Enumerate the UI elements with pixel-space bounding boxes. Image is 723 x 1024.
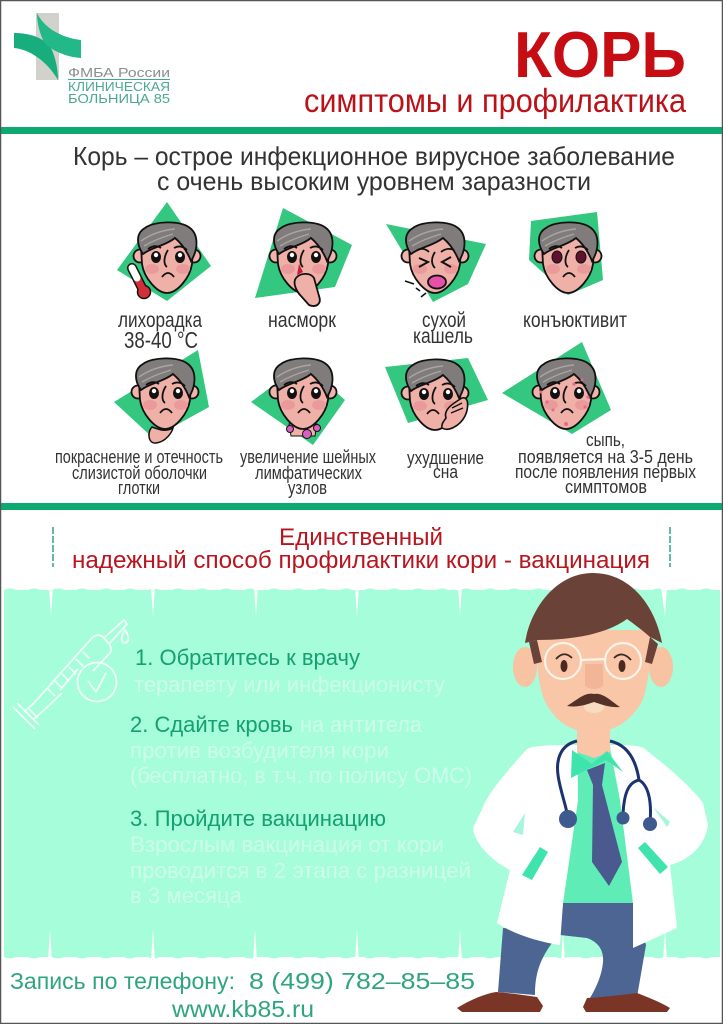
symptom: fever: 38-40 °C bbox=[124, 327, 198, 353]
step 3: в 3 месяца bbox=[130, 883, 243, 908]
symptom: rash bbox=[502, 342, 697, 497]
doctor illustration bbox=[457, 573, 708, 1012]
nose bbox=[585, 664, 603, 689]
symptom: swollen lymph nodes: узлов bbox=[288, 477, 327, 498]
intro text: с очень высоким уровнем заразности bbox=[157, 166, 591, 196]
symptom: conjunctivitis: конъюктивит bbox=[523, 309, 627, 332]
middle green divider bbox=[0, 503, 723, 510]
subtitle: симптомы и профилактика bbox=[304, 82, 687, 119]
step 2: (бесплатно, в т.ч. по полису ОМС) bbox=[130, 763, 472, 788]
hair bbox=[525, 573, 662, 643]
symptom: poor sleep bbox=[385, 358, 488, 482]
intro text: Корь – острое инфекционное вирусное заболевание bbox=[73, 141, 675, 171]
symptom: rash: появляется на 3-5 день bbox=[518, 446, 693, 467]
hospital logo: ФМБА России bbox=[68, 65, 170, 80]
symptom: red throat: слизистой оболочки bbox=[72, 462, 207, 483]
vaccination heading: Единственный bbox=[279, 524, 443, 551]
left shoe bbox=[457, 992, 543, 1012]
right pocket bbox=[638, 842, 668, 874]
left pocket bbox=[522, 847, 548, 880]
symptom: fever: лихорадка bbox=[118, 309, 202, 332]
step 2: против возбудителя кори bbox=[130, 738, 389, 763]
symptom: poor sleep: ухудшение bbox=[407, 447, 484, 468]
contact phone: Запись по телефону: bbox=[10, 968, 235, 994]
collar bbox=[571, 750, 623, 778]
left coat panel bbox=[473, 745, 578, 945]
right shoe bbox=[583, 993, 670, 1012]
neck bbox=[577, 715, 610, 758]
step 1 bbox=[134, 645, 445, 697]
glasses bbox=[545, 643, 641, 679]
tie bbox=[587, 763, 622, 886]
stethoscope bbox=[558, 741, 651, 823]
eyes bbox=[560, 660, 626, 672]
vaccination heading bbox=[53, 524, 670, 574]
hospital logo: КЛИНИЧЕСКАЯ bbox=[68, 79, 170, 94]
coat fold left bbox=[513, 813, 525, 835]
hospital logo bbox=[14, 13, 170, 106]
website: www.kb85.ru bbox=[171, 996, 314, 1022]
face bbox=[535, 630, 652, 732]
symptom: poor sleep: сна bbox=[433, 461, 459, 482]
vaccination heading: надежный способ профилактики кори - вакцинация bbox=[72, 547, 650, 574]
symptom: swollen lymph nodes bbox=[240, 358, 377, 498]
contact phone bbox=[10, 968, 475, 994]
eyebrows bbox=[556, 654, 631, 660]
symptom: rash: сыпь, bbox=[586, 429, 625, 450]
shirt bbox=[563, 750, 633, 903]
ears bbox=[513, 647, 537, 687]
symptom: swollen lymph nodes: лимфатических bbox=[255, 462, 363, 483]
symptom: fever bbox=[117, 202, 211, 353]
symptom: runny nose bbox=[255, 208, 352, 332]
hospital logo: БОЛЬНИЦА 85 bbox=[68, 91, 170, 106]
top green divider bbox=[0, 127, 723, 134]
stethoscope heads bbox=[559, 810, 657, 831]
intro text bbox=[73, 141, 675, 196]
lips bbox=[584, 701, 604, 713]
symptom: dry cough: кашель bbox=[413, 325, 473, 348]
symptom: dry cough: сухой bbox=[422, 309, 466, 332]
symptom: red throat: покраснение и отечность bbox=[55, 446, 223, 467]
mint prevention panel bbox=[4, 586, 720, 962]
sideburns bbox=[529, 637, 658, 664]
symptom: red throat bbox=[55, 350, 223, 498]
step 2 bbox=[130, 712, 472, 788]
title: КОРЬ bbox=[514, 18, 686, 91]
step 3 bbox=[130, 806, 471, 908]
symptom: rash: симптомов bbox=[565, 476, 647, 497]
contact phone: 8 (499) 782–85–85 bbox=[249, 968, 475, 994]
step 1: 1. Обратитесь к врачу bbox=[135, 645, 360, 670]
symptom: red throat: глотки bbox=[118, 477, 160, 498]
step 2: на антитела bbox=[300, 712, 423, 737]
step 3: Взрослым вакцинация от кори bbox=[130, 832, 444, 857]
step 3: проводится в 2 этапа с разницей bbox=[130, 858, 471, 883]
symptom: runny nose: насморк bbox=[268, 309, 337, 332]
step 2: 2. Сдайте кровь bbox=[130, 712, 293, 737]
coat fold right bbox=[653, 807, 670, 827]
icon: syringe bbox=[13, 620, 128, 729]
step 1: терапевту или инфекционисту bbox=[134, 672, 445, 697]
symptom: dry cough bbox=[386, 222, 486, 348]
symptom: conjunctivitis bbox=[523, 212, 627, 332]
moustache bbox=[567, 694, 620, 707]
legs bbox=[498, 903, 646, 998]
step 3: 3. Пройдите вакцинацию bbox=[130, 806, 386, 831]
right coat panel bbox=[610, 745, 708, 948]
symptom: swollen lymph nodes: увеличение шейных bbox=[240, 446, 377, 467]
